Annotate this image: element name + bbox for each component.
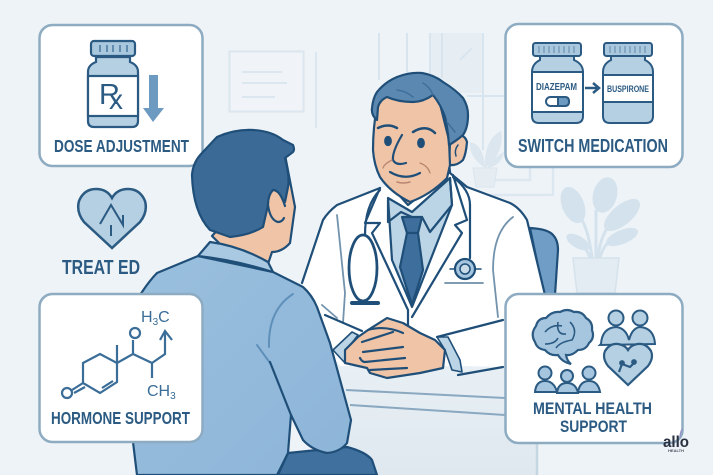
icon: molecule: H: [141, 309, 153, 326]
icon: Rx bottle: [88, 41, 138, 127]
doctor shirt and tie: [388, 178, 452, 307]
icon: group of people: [535, 366, 600, 393]
icon: buspirone bottle: BUSPIRONE: [607, 84, 649, 95]
icon: diazepam bottle: [532, 43, 583, 123]
icon: heart: [78, 189, 146, 248]
icon: molecule: C: [158, 309, 170, 326]
figure: doctor: [302, 73, 545, 378]
icon: couple: [600, 310, 655, 345]
panel: switch medication: [506, 24, 682, 167]
doctor coat: [302, 173, 545, 367]
label: dose adjustment: DOSE ADJUSTMENT: [54, 136, 189, 156]
icon: molecule: 3: [170, 391, 176, 402]
icon: molecule: CH: [147, 383, 170, 400]
patient face and neck: [212, 155, 295, 264]
logo: allo health: [663, 429, 689, 453]
stethoscope: [349, 177, 483, 303]
label: mental health support: SUPPORT: [560, 417, 627, 436]
coat folds: [322, 215, 513, 323]
doctor cuffs: [333, 332, 462, 372]
logo: allo health: allo: [663, 434, 689, 451]
figure: patient: [133, 130, 377, 475]
patient shirt: [133, 256, 351, 475]
doctor hands: [345, 318, 445, 378]
panel: hormone support: [40, 294, 202, 442]
icon: molecule: [62, 309, 176, 402]
icon: buspirone bottle: [603, 43, 653, 123]
logo: allo health: HEALTH: [668, 448, 684, 453]
patient lower dark garment: [278, 447, 377, 475]
icon: molecule: 3: [153, 317, 159, 328]
icon: heart with figure: [604, 344, 652, 385]
patient ear: [268, 190, 285, 222]
label: treat ed: TREAT ED: [62, 257, 140, 279]
patient hair: [192, 130, 294, 237]
doctor sleeves: [325, 315, 503, 375]
icon: brain: [533, 310, 593, 364]
panel: mental health support: [506, 294, 682, 443]
icon: arrow between bottles: [585, 83, 599, 93]
label: hormone support: HORMONE SUPPORT: [51, 408, 190, 428]
label: mental health support: [533, 399, 652, 436]
background: office wall, window and plants: [230, 33, 645, 475]
icon: Rx bottle: R: [99, 79, 120, 111]
label: mental health support: MENTAL HEALTH: [533, 399, 652, 418]
label: switch medication: SWITCH MEDICATION: [518, 136, 668, 156]
panel: dose adjustment: [40, 25, 202, 166]
doctor head: [372, 73, 468, 205]
doctor lapels: [365, 175, 467, 327]
icon: diazepam bottle: DIAZEPAM: [536, 82, 577, 93]
icon: Rx bottle: x: [109, 84, 123, 115]
patient collar: [198, 242, 273, 272]
icon: down arrow: [143, 75, 164, 122]
